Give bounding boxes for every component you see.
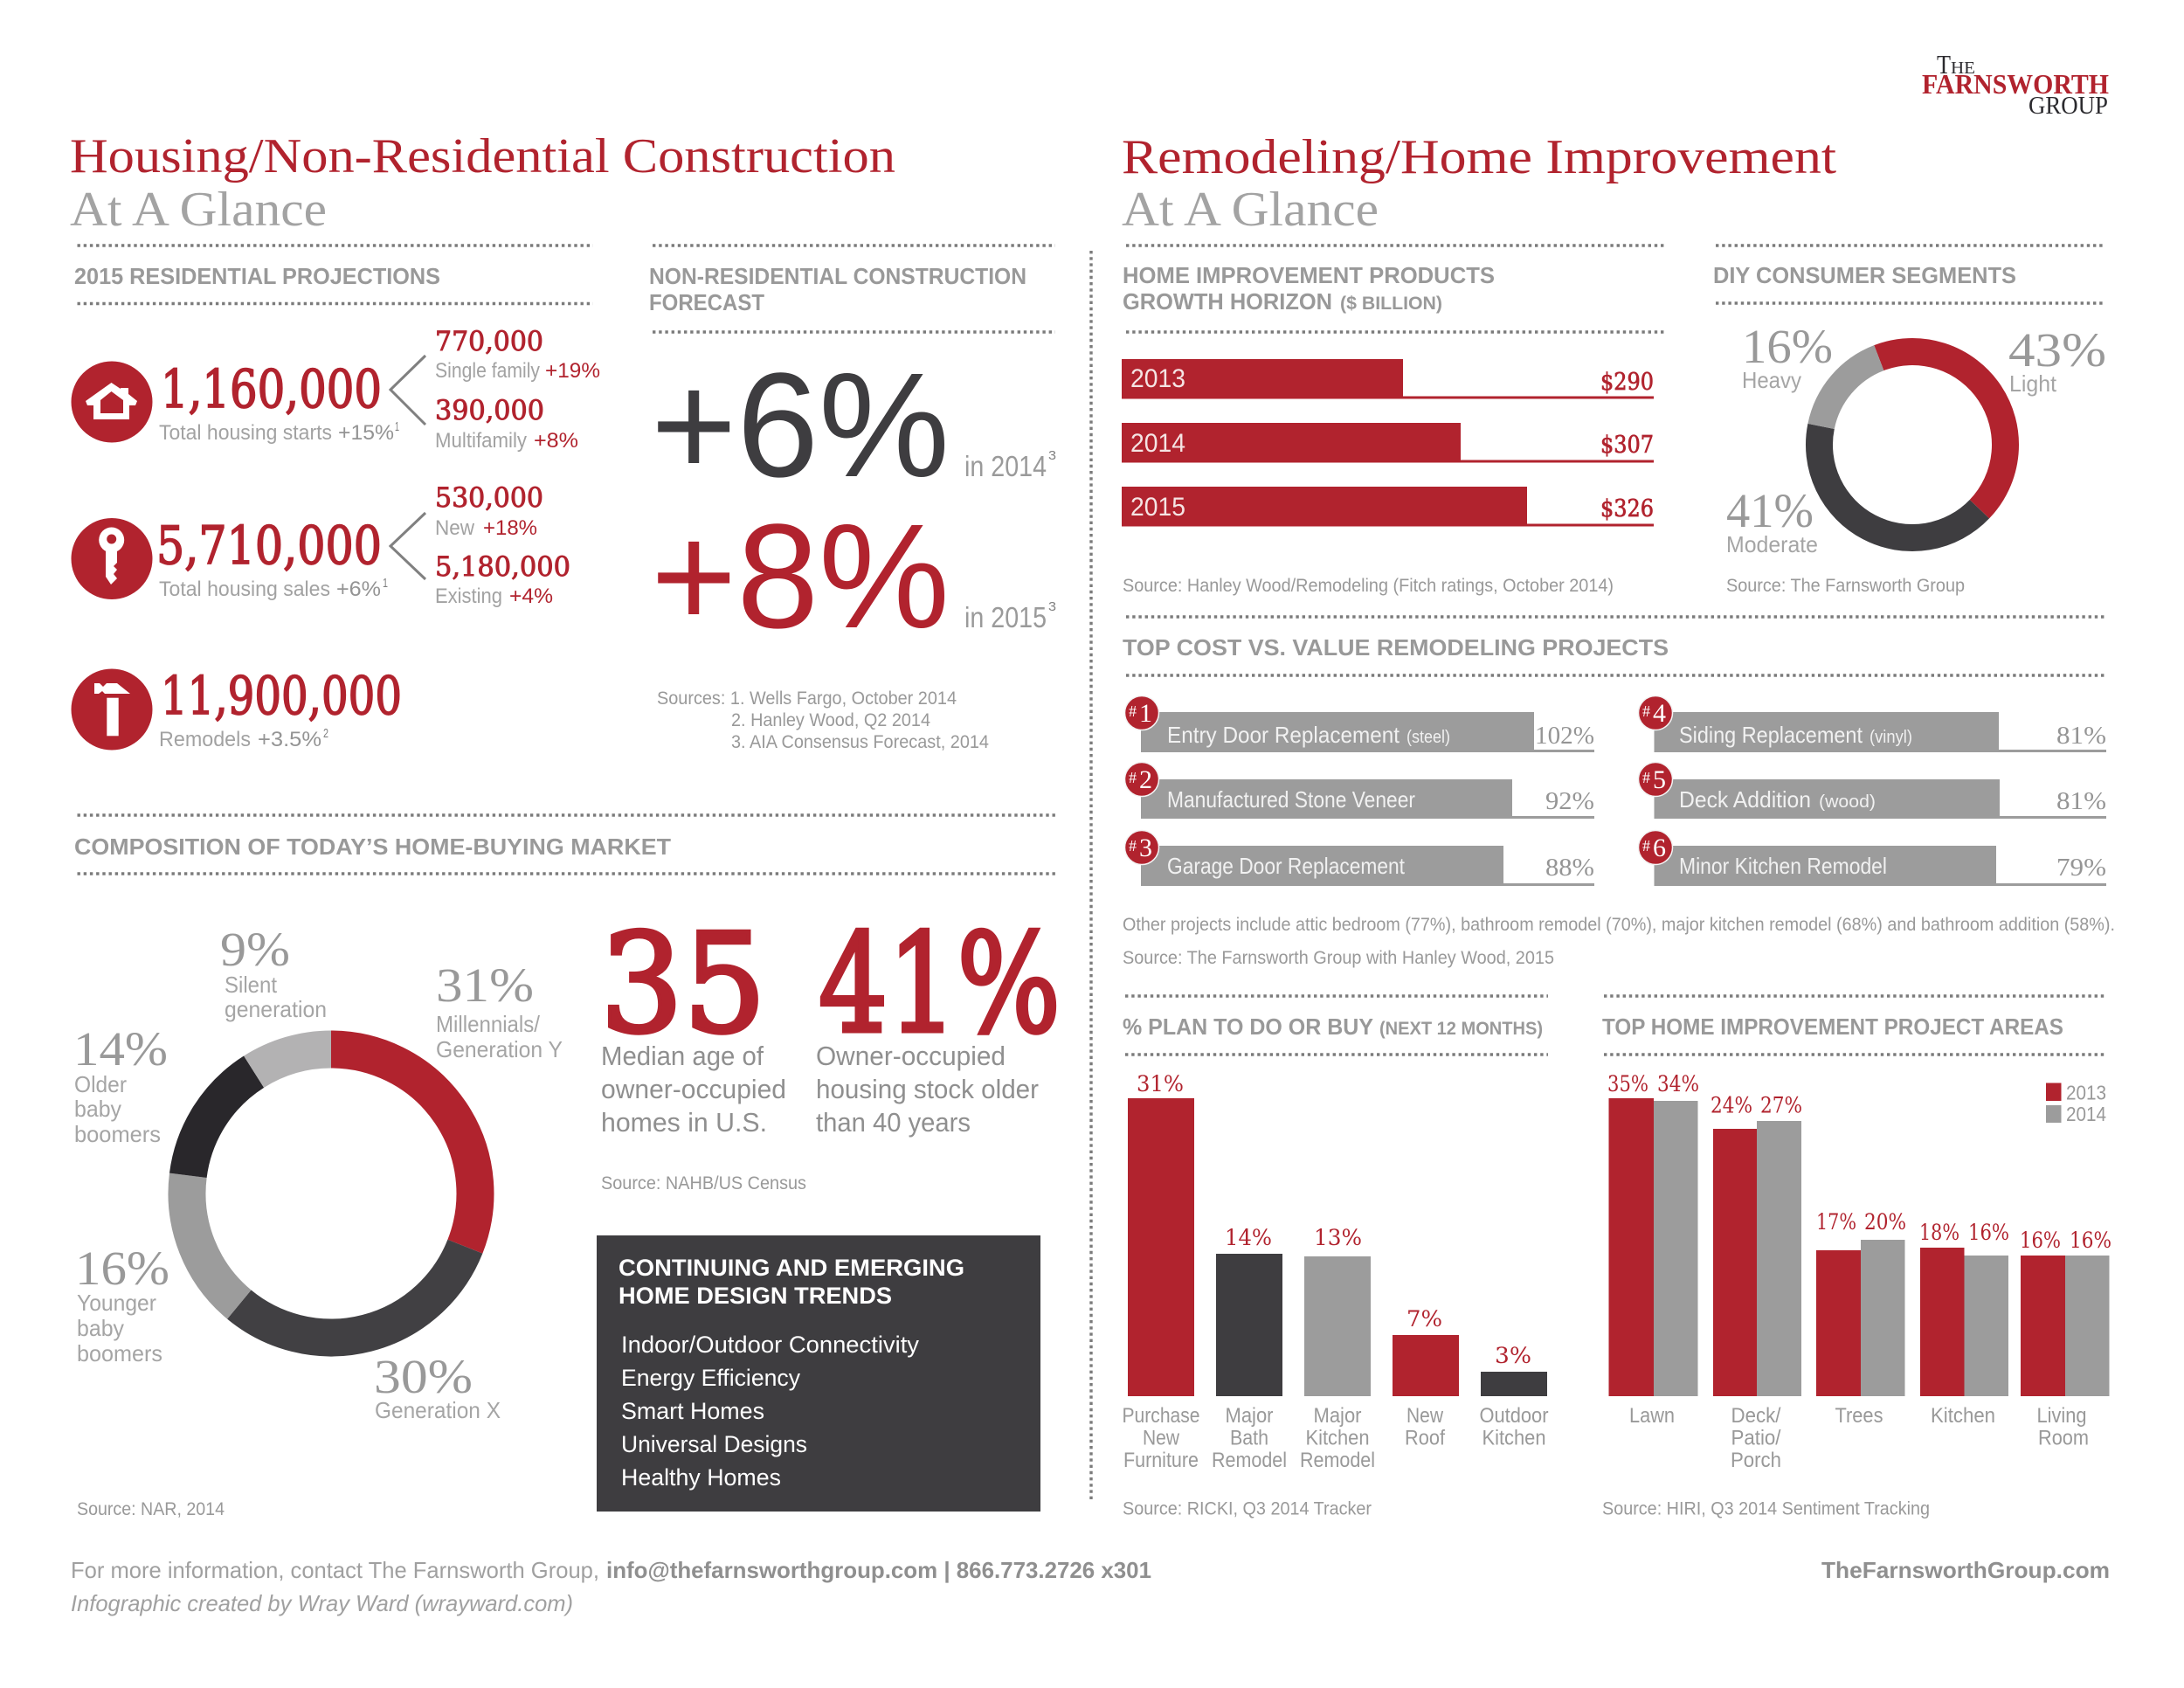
stat: new homes: New [435, 516, 475, 540]
project #3: 88% [1545, 854, 1594, 882]
stat: multifamily: Multifamily [435, 429, 527, 453]
grouped bar chart: project areas: Porch [1731, 1449, 1781, 1472]
grouped bar chart: project areas: 24% [1711, 1092, 1752, 1118]
bar: 2014 [1122, 423, 1654, 463]
label: 41% moderate [1726, 484, 1818, 557]
bar: 2014: $307 [1600, 432, 1654, 459]
callout: home design trends: CONTINUING AND EMERGING [619, 1255, 964, 1281]
footer: contact information: info@thefarnsworthgroup.com | 866.773.2726 x301 [606, 1557, 1151, 1583]
label: 43% light: Light [2009, 370, 2057, 397]
heading: growth horizon [1123, 262, 1495, 315]
stat: total housing sales: Total housing sales [159, 578, 330, 601]
heading: composition of home-buying market: COMPOSITION OF TODAY’S HOME-BUYING MARKET [74, 834, 671, 860]
project #2: Manufactured Stone Veneer [1167, 786, 1415, 813]
panel: top cost vs value remodeling projects [1123, 617, 2115, 968]
label: 9% silent generation [220, 923, 327, 1022]
project #1: # [1129, 702, 1137, 720]
bracket: housing starts split [390, 356, 425, 425]
stat: new homes: 530,000 [435, 482, 543, 514]
stat: 41% older housing stock: housing stock older [816, 1074, 1039, 1104]
sources list: Sources: 1. Wells Fargo, October 2014 [657, 688, 957, 709]
heading: cost vs value: TOP COST VS. VALUE REMODELING PROJECTS [1123, 634, 1669, 661]
callout: home design trends: Healthy Homes [621, 1464, 781, 1491]
donut chart: home buyers by generation [187, 1049, 475, 1338]
heading: growth horizon: HOME IMPROVEMENT PRODUCTS [1123, 262, 1495, 288]
project #4 [1639, 695, 2106, 752]
grouped bar chart: project areas: Lawn [1629, 1404, 1675, 1428]
stat: median age 35: Median age of [601, 1041, 764, 1071]
logo: The Farnsworth Group: T [1937, 49, 1951, 80]
stat: new homes [435, 482, 543, 540]
title: Housing/Non-Residential Construction [70, 129, 895, 237]
stat: remodels: 11,900,000 [161, 666, 402, 727]
bar: 2015: $326 [1600, 495, 1654, 522]
bar chart: plan to do or buy: New [1143, 1426, 1180, 1450]
heading: plan to do or buy: (NEXT 12 MONTHS) [1379, 1019, 1543, 1039]
project #5 [1639, 762, 2106, 819]
heading: non-residential construction forecast: NON-RESIDENTIAL CONSTRUCTION [649, 263, 1026, 289]
stat: total housing starts: +15% [338, 421, 394, 445]
grouped bar chart: project areas: 27% [1760, 1092, 1802, 1118]
label: 16% younger baby boomers: Younger [77, 1290, 156, 1316]
project #1: 1 [1139, 699, 1152, 728]
project #5: (wood) [1819, 792, 1876, 812]
project #1 [1125, 695, 1594, 752]
label: 14% older baby boomers: 14% [73, 1022, 168, 1076]
label: 14% older baby boomers [73, 1022, 168, 1147]
bar chart: plan to do or buy: Purchase [1122, 1404, 1200, 1428]
project #6: 6 [1653, 834, 1666, 862]
source: RICKI: Source: RICKI, Q3 2014 Tracker [1123, 1499, 1372, 1519]
bar chart: plan to do or buy: Furniture [1123, 1449, 1199, 1472]
project #3 [1125, 830, 1594, 886]
label: 41% moderate: 41% [1726, 484, 1814, 537]
stat: median age 35: owner-occupied [601, 1074, 786, 1104]
project #2 [1125, 762, 1594, 819]
logo: The Farnsworth Group: HE [1951, 59, 1975, 78]
sources list: 2. Hanley Wood, Q2 2014 [731, 710, 930, 730]
grouped bar chart: project areas: Deck/ [1731, 1404, 1781, 1428]
source: Hanley Wood: Source: Hanley Wood/Remodeling (Fitch ratings, October 2014) [1123, 576, 1614, 596]
bar chart: plan to do or buy: Remodel [1212, 1449, 1287, 1472]
bar chart: plan to do or buy: Roof [1405, 1426, 1445, 1450]
bar chart: plan to do or buy: Outdoor [1480, 1404, 1549, 1428]
stat: remodels: Remodels [159, 728, 251, 751]
heading: 2015 residential projections: 2015 RESIDENTIAL PROJECTIONS [74, 263, 440, 289]
panel: non-residential construction forecast [649, 246, 1056, 752]
project #5: 5 [1653, 765, 1666, 794]
bar chart: plan to do or buy: Bath [1230, 1426, 1268, 1450]
grouped bar chart: project areas: 20% [1864, 1209, 1906, 1235]
stat: +6% in 2014: in 2014 [964, 450, 1047, 482]
sources list [657, 688, 989, 752]
stat: total housing sales: +6% [336, 578, 381, 601]
heading: plan to do or buy [1123, 1013, 1543, 1040]
stat: single family [435, 326, 600, 383]
label: 9% silent generation: generation [225, 996, 327, 1022]
icon: hammer [72, 669, 152, 750]
bar chart: plan to do or buy: Kitchen [1305, 1426, 1370, 1450]
stat: +8% in 2015: +8% [651, 494, 950, 660]
callout: home design trends: Energy Efficiency [621, 1365, 800, 1391]
bar chart: plan to do or buy: Major [1314, 1404, 1362, 1428]
heading: non-residential construction forecast: FORECAST [649, 289, 764, 315]
project #2: # [1129, 769, 1137, 786]
panel: home improvement products growth horizon [1122, 246, 1664, 596]
heading: growth horizon: ($ BILLION) [1340, 294, 1442, 314]
bar chart: plan to do or buy: 7% [1406, 1306, 1442, 1332]
stat: remodels: 2 [323, 726, 328, 741]
label: 43% light [2008, 323, 2106, 397]
stat: total housing starts: 1 [395, 419, 399, 434]
label: 31% millennials: Generation Y [436, 1036, 563, 1062]
footer: contact information: Infographic created by Wray Ward (wrayward.com) [71, 1590, 573, 1616]
stat: +8% in 2015: 3 [1048, 599, 1056, 614]
project #4: 4 [1653, 699, 1666, 728]
bracket: housing sales split [390, 513, 425, 579]
stat: existing homes: +4% [509, 585, 553, 608]
project #6: # [1642, 837, 1650, 854]
label: 9% silent generation: 9% [220, 923, 290, 976]
project #5: Deck Addition [1679, 786, 1811, 813]
callout: home design trends [597, 1235, 1040, 1512]
title: Remodeling/Home Improvement: At A Glance [1122, 183, 1379, 237]
stat: total housing sales [72, 515, 388, 601]
stat: remodels [72, 666, 402, 751]
label: 14% older baby boomers: Older [74, 1071, 127, 1097]
stat: remodels: +3.5% [258, 728, 321, 751]
label: 16% heavy: Heavy [1742, 367, 1801, 393]
grouped bar chart: project areas: Room [2038, 1426, 2089, 1450]
stat: existing homes [435, 551, 570, 608]
stat: +8% in 2015: in 2015 [964, 601, 1047, 633]
panel: top home improvement project areas [1602, 996, 2111, 1519]
bar: 2013: $290 [1600, 369, 1654, 396]
project #4: Siding Replacement [1679, 722, 1863, 748]
logo: The Farnsworth Group [1922, 49, 2109, 120]
donut chart: DIY segments [1819, 352, 2006, 538]
source: Farnsworth with Hanley Wood: Source: The Farnsworth Group with Hanley Wood, 2015 [1123, 948, 1554, 968]
heading: non-residential construction forecast [649, 263, 1026, 315]
sources list: 3. AIA Consensus Forecast, 2014 [731, 732, 989, 752]
project #3: 3 [1139, 834, 1152, 862]
grouped bar chart: project areas: Patio/ [1731, 1426, 1781, 1450]
legend: 2013 and 2014: 2013 [2066, 1082, 2106, 1104]
footer: contact information: For more information, contact The Farnsworth Group, [71, 1557, 599, 1583]
grouped bar chart: project areas: 17% [1816, 1209, 1856, 1235]
project #3: Garage Door Replacement [1167, 853, 1406, 879]
label: 9% silent generation: Silent [225, 972, 278, 998]
footer: contact information [71, 1557, 1151, 1616]
label: 41% moderate: Moderate [1726, 531, 1818, 557]
project #2: 92% [1545, 787, 1594, 815]
bar chart: plan to do or buy [1122, 1071, 1549, 1472]
stat: total housing starts: Total housing starts [159, 421, 332, 445]
logo: The Farnsworth Group: GROUP [2028, 93, 2108, 120]
project #6: Minor Kitchen Remodel [1679, 853, 1887, 879]
panel: plan to do or buy [1122, 996, 1549, 1519]
label: 43% light: 43% [2008, 323, 2106, 377]
grouped bar chart: project areas: 34% [1657, 1071, 1699, 1097]
project #6 [1639, 830, 2106, 886]
label: 30% generation X: 30% [374, 1350, 473, 1403]
stat: +6% in 2014: +6% [651, 342, 950, 508]
stat: median age 35 [600, 904, 786, 1138]
grouped bar chart: project areas: 35% [1607, 1071, 1648, 1097]
grouped bar chart: project areas: Living [2037, 1404, 2086, 1428]
stat: existing homes: Existing [435, 585, 502, 608]
title: Housing/Non-Residential Construction: At A Glance [70, 183, 327, 237]
project #2: 2 [1139, 765, 1152, 794]
bar chart: plan to do or buy: 13% [1314, 1225, 1362, 1250]
label: 31% millennials [436, 958, 563, 1062]
project #4: # [1642, 702, 1650, 720]
bar: 2013 [1122, 359, 1654, 398]
stat: 41% older housing stock [816, 904, 1061, 1138]
stat: total housing starts [72, 359, 399, 445]
stat: multifamily [435, 395, 578, 453]
stat: existing homes: 5,180,000 [435, 551, 570, 583]
stat: new homes: +18% [483, 516, 537, 540]
bar chart: plan to do or buy: 14% [1225, 1225, 1272, 1250]
stat: median age 35: homes in U.S. [601, 1107, 767, 1138]
source: NAR: Source: NAR, 2014 [77, 1499, 225, 1519]
stat: median age 35: 35 [600, 904, 766, 1063]
footer: website: TheFarnsworthGroup.com [1821, 1557, 2110, 1583]
callout: home design trends: HOME DESIGN TRENDS [619, 1283, 892, 1309]
stat: single family: 770,000 [435, 326, 543, 357]
note: other projects: Other projects include attic bedroom (77%), bathroom remodel (70%), major kitchen remodel (68%) and bathroom addition (58%). [1123, 915, 2115, 935]
source: Farnsworth: Source: The Farnsworth Group [1726, 576, 1965, 596]
label: 30% generation X: Generation X [375, 1397, 501, 1423]
project #3: # [1129, 837, 1137, 854]
project #1: 102% [1535, 722, 1594, 750]
project #4: 81% [2056, 722, 2106, 750]
stat: 41% older housing stock: Owner-occupied [816, 1041, 1006, 1071]
stat: total housing starts: 1,160,000 [161, 359, 382, 420]
title: Remodeling/Home Improvement [1122, 130, 1836, 237]
stat: total housing sales: 5,710,000 [156, 515, 382, 577]
stat: single family: +19% [545, 359, 600, 383]
project #1: Entry Door Replacement [1167, 722, 1400, 748]
bar: 2014: 2014 [1130, 429, 1185, 458]
project #6: 79% [2056, 854, 2106, 882]
heading: plan to do or buy: % PLAN TO DO OR BUY [1123, 1013, 1373, 1040]
label: 16% younger baby boomers: boomers [77, 1340, 162, 1366]
grouped bar chart: project areas: Trees [1835, 1404, 1883, 1428]
grouped bar chart: project areas: 16% [2070, 1228, 2111, 1253]
grouped bar chart: project areas [1607, 1071, 2111, 1472]
icon: key [72, 518, 152, 599]
panel: composition of today's home-buying market [73, 815, 1061, 1519]
logo: The Farnsworth Group: FARNSWORTH [1922, 68, 2109, 100]
label: 14% older baby boomers: boomers [74, 1121, 161, 1147]
source: HIRI: Source: HIRI, Q3 2014 Sentiment Tracking [1602, 1499, 1930, 1519]
icon: house [72, 362, 152, 442]
bar: 2015: 2015 [1130, 493, 1185, 522]
grouped bar chart: project areas: 18% [1919, 1220, 1959, 1245]
bar chart: plan to do or buy: Kitchen [1482, 1426, 1546, 1450]
heading: growth horizon: GROWTH HORIZON [1123, 288, 1332, 315]
stat: 41% older housing stock: 41% [819, 904, 1061, 1063]
heading: DIY consumer segments: DIY CONSUMER SEGMENTS [1713, 262, 2016, 288]
legend: 2013 and 2014 [2046, 1082, 2106, 1125]
label: 31% millennials: Millennials/ [436, 1011, 541, 1037]
bar: 2013: 2013 [1130, 364, 1185, 393]
title: Remodeling/Home Improvement: Remodeling/Home Improvement [1122, 130, 1836, 184]
bar chart: plan to do or buy: 31% [1137, 1071, 1184, 1097]
heading: project areas: TOP HOME IMPROVEMENT PROJECT AREAS [1602, 1013, 2063, 1040]
label: 16% younger baby boomers: baby [77, 1315, 124, 1341]
legend: 2013 and 2014: 2014 [2066, 1103, 2106, 1125]
title: Housing/Non-Residential Construction: Housing/Non-Residential Construction [70, 129, 895, 183]
label: 14% older baby boomers: baby [74, 1096, 121, 1122]
project #4: (vinyl) [1870, 728, 1912, 747]
stat: 41% older housing stock: than 40 years [816, 1107, 971, 1138]
label: 16% younger baby boomers [75, 1242, 169, 1366]
grouped bar chart: project areas: 16% [2020, 1228, 2061, 1253]
grouped bar chart: project areas: Kitchen [1931, 1404, 1995, 1428]
label: 30% generation X [374, 1350, 501, 1423]
grouped bar chart: project areas: 16% [1968, 1220, 2009, 1245]
project #5: # [1642, 769, 1650, 786]
panel: 2015 residential projections [72, 246, 600, 751]
bar chart: plan to do or buy: Major [1225, 1404, 1274, 1428]
bar chart: plan to do or buy: Remodel [1300, 1449, 1375, 1472]
stat: single family: Single family [435, 359, 540, 383]
source: NAHB: Source: NAHB/US Census [601, 1173, 806, 1193]
stat: +6% in 2014: 3 [1048, 448, 1056, 463]
stat: multifamily: +8% [534, 429, 578, 453]
panel: DIY consumer segments [1713, 246, 2106, 596]
stat: total housing sales: 1 [383, 576, 388, 591]
project #1: (steel) [1406, 728, 1450, 747]
callout: home design trends: Smart Homes [621, 1398, 764, 1424]
stat: multifamily: 390,000 [435, 395, 544, 426]
label: 16% younger baby boomers: 16% [75, 1242, 169, 1295]
project #5: 81% [2056, 787, 2106, 815]
bar chart: plan to do or buy: New [1406, 1404, 1444, 1428]
label: 31% millennials: 31% [436, 958, 534, 1012]
bar: 2015 [1122, 487, 1654, 526]
callout: home design trends: Indoor/Outdoor Connectivity [621, 1332, 920, 1358]
label: 16% heavy: 16% [1742, 320, 1833, 373]
bar chart: plan to do or buy: 3% [1495, 1343, 1531, 1368]
callout: home design trends: Universal Designs [621, 1431, 807, 1457]
